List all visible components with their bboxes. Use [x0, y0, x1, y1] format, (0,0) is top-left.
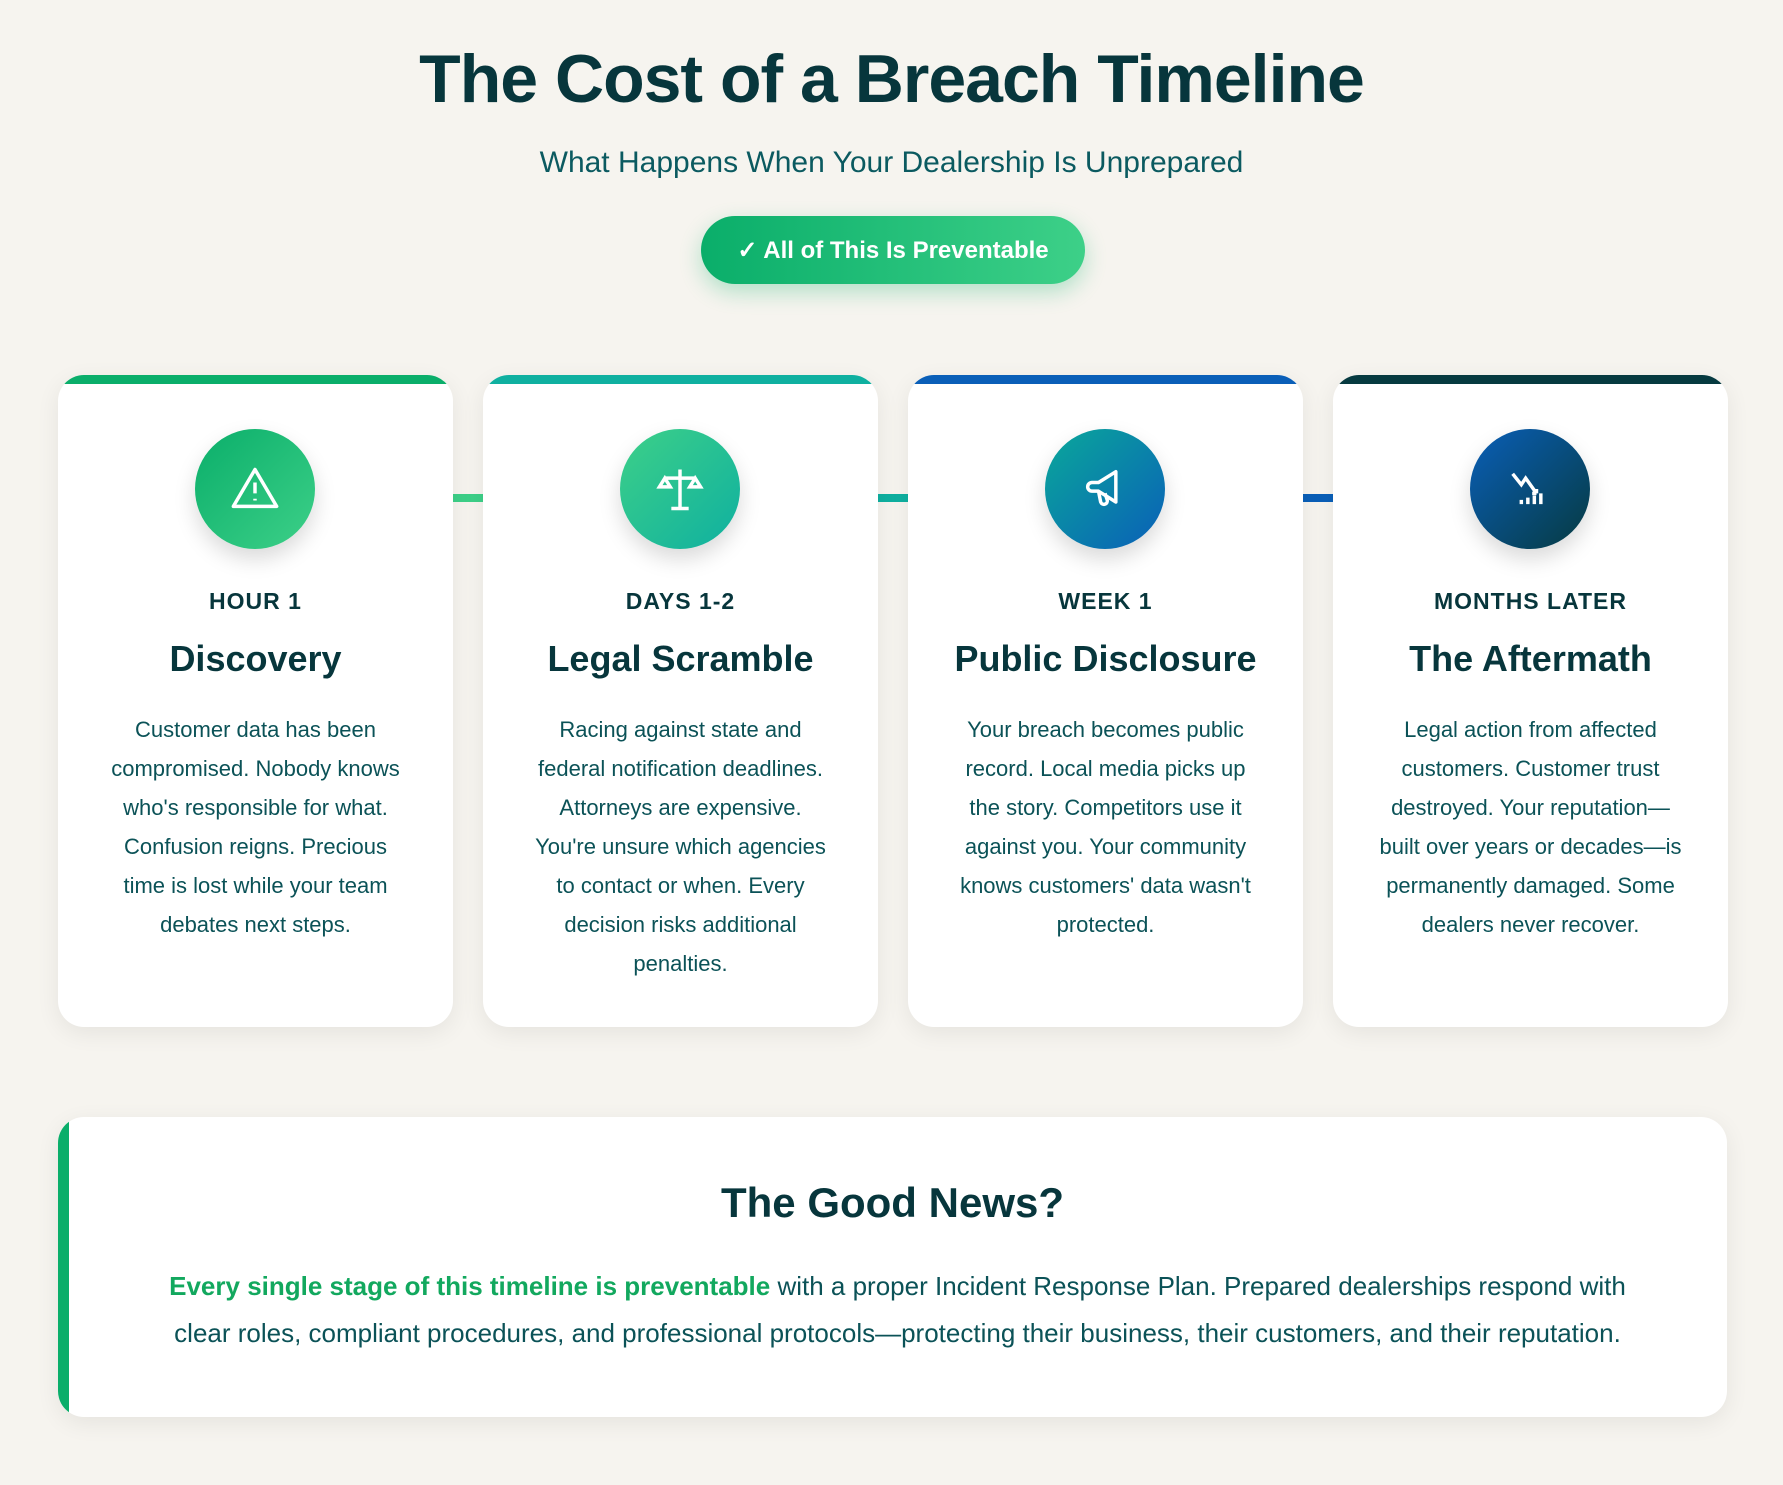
heading: Discovery — [169, 638, 342, 679]
panel: good news — [58, 1117, 1727, 1417]
connector 1 — [452, 494, 484, 502]
connector 3 — [1302, 494, 1334, 502]
heading: Legal Scramble — [547, 638, 814, 679]
heading: The Good News? — [721, 1179, 1064, 1226]
card: week 1 — [908, 375, 1303, 1027]
heading: Public Disclosure — [954, 638, 1257, 679]
body text: Every single stage of this timeline is preventable with a proper Incident Response Plan. Prepared dealerships respond with clear roles, compliant procedures, and professional protocols—protecting their business, their customers, and their reputation. — [169, 1271, 1626, 1348]
body text: Legal action from affected customers. Customer trust destroyed. Your reputation—built over years or decades—is permanently damaged. Some dealers never recover. — [1379, 717, 1682, 937]
label: DAYS 1-2 — [626, 588, 735, 614]
body text: Racing against state and federal notification deadlines. Attorneys are expensive. You're unsure which agencies to contact or when. Every decision risks additional penalties. — [535, 717, 826, 976]
title: The Cost of a Breach Timeline — [419, 41, 1364, 117]
connector 2 — [877, 494, 909, 502]
badge button — [701, 216, 1085, 284]
badge button: ✓ All of This Is Preventable — [737, 236, 1049, 264]
card: months later — [1333, 375, 1728, 1027]
icon: megaphone — [1045, 429, 1165, 549]
subtitle: What Happens When Your Dealership Is Unprepared — [540, 146, 1243, 179]
card: hour 1 — [58, 375, 453, 1027]
body text: Your breach becomes public record. Local media picks up the story. Competitors use it against you. Your community knows customers' data wasn't protected. — [960, 717, 1251, 937]
label: WEEK 1 — [1058, 588, 1153, 614]
icon: warning — [195, 429, 315, 549]
label: MONTHS LATER — [1434, 588, 1627, 614]
icon: down chart — [1470, 429, 1590, 549]
heading: The Aftermath — [1409, 638, 1652, 679]
icon: scales — [620, 429, 740, 549]
card: days 1-2 — [483, 375, 878, 1027]
label: HOUR 1 — [209, 588, 302, 614]
body text: Customer data has been compromised. Nobody knows who's responsible for what. Confusion reigns. Precious time is lost while your team debates next steps. — [111, 717, 400, 937]
